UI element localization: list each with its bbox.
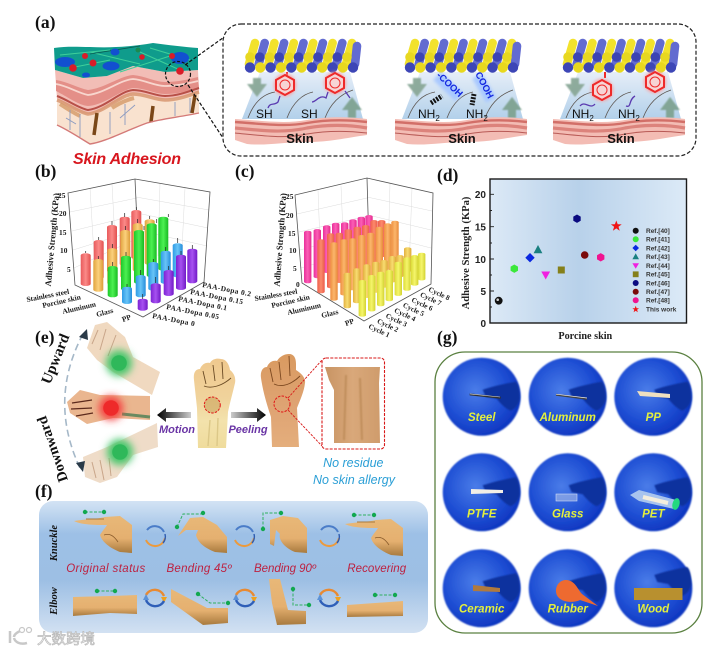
status labels: Bending 45º	[166, 563, 232, 575]
bars: aluminum row	[330, 221, 399, 301]
y ticks: 10	[475, 255, 486, 266]
data points	[495, 214, 622, 305]
PET sample: PET	[642, 508, 665, 520]
material axis labels: Glass	[95, 306, 114, 319]
y ticks	[475, 190, 486, 330]
y axis ticks and title: 20	[286, 211, 294, 220]
legend: Ref.[47]	[646, 289, 670, 296]
cycle icons elbow	[143, 590, 341, 606]
material axis labels: Porcine skin	[41, 292, 82, 310]
panel e: wrist motion test	[34, 322, 396, 487]
status labels: Recovering	[347, 563, 407, 575]
motion range arc	[65, 329, 88, 472]
mechanism 2: carboxyl and amine: 2	[483, 114, 488, 123]
upward wrist with green marker	[87, 322, 160, 395]
no allergy note: No skin allergy	[313, 473, 396, 487]
hand original	[74, 510, 132, 553]
material axis labels: Stainless steel	[26, 287, 70, 304]
legend: Ref.[42]	[646, 245, 670, 252]
cycle axis labels: Cycle 7	[419, 291, 443, 308]
mechanism 3: catechol and amine: Skin	[607, 131, 635, 146]
y axis ticks and title: 0	[296, 280, 300, 289]
y axis ticks and title: 15	[59, 228, 67, 237]
rubber sample	[529, 549, 607, 627]
status labels	[66, 563, 407, 575]
bars: aluminum	[108, 217, 168, 297]
formulation axis labels: PAA-Dopa 0	[152, 311, 196, 328]
mechanism 1: catechol and thiol	[235, 43, 367, 146]
legend: Ref.[40]	[646, 228, 670, 235]
background panel	[39, 501, 428, 633]
formulation axis labels: PAA-Dopa 0.2	[202, 280, 252, 298]
legend: Ref.[48]	[646, 298, 670, 305]
mechanism 2: carboxyl and amine: NH	[466, 107, 483, 121]
formulation axis labels: PAA-Dopa 0.1	[178, 294, 228, 312]
wood sample	[614, 549, 692, 627]
hydrogel top layer	[54, 43, 198, 78]
skin adhesion caption: Skin Adhesion	[73, 151, 181, 168]
green frame	[435, 352, 702, 633]
legend: This work	[646, 306, 677, 313]
y ticks: 0	[480, 319, 486, 330]
mechanism 2: carboxyl and amine: Skin	[448, 131, 476, 146]
y ticks: 5	[480, 287, 486, 298]
inset of clean skin	[322, 358, 384, 449]
PP sample	[614, 358, 692, 436]
bars: glass row	[344, 247, 411, 308]
cycle axis labels	[367, 286, 451, 340]
y axis title: Adhesive Strength (KPa)	[461, 196, 472, 309]
panel d label: (d)	[437, 165, 459, 185]
zoom lines to inset	[288, 360, 322, 446]
mechanism 3: catechol and amine: NH	[572, 107, 589, 121]
elbow recovered	[347, 593, 403, 617]
formulation axis labels: PAA-Dopa 0.15	[190, 287, 244, 306]
panel b: 3D bar chart	[26, 179, 252, 328]
bars: stainless steel row	[304, 215, 373, 283]
legend: Ref.[44]	[646, 263, 670, 270]
status labels: Original status	[66, 563, 145, 575]
glass sample: Glass	[552, 508, 583, 520]
cycle axis labels: Cycle 6	[410, 296, 434, 313]
downward wrist with green marker	[83, 423, 158, 483]
motion label: Motion	[159, 424, 195, 436]
pink layers	[55, 66, 199, 114]
material axis labels: Stainless steel	[254, 287, 298, 303]
mechanism 2: carboxyl and amine: COOH	[472, 70, 496, 101]
steel sample	[443, 358, 521, 436]
panel c label: (c)	[235, 161, 255, 181]
cycle axis labels: Cycle 4	[393, 307, 417, 324]
axes box	[295, 178, 433, 321]
plot frame	[490, 179, 686, 323]
panel g: adhesion to materials	[435, 352, 702, 633]
cycle axis labels: Cycle 8	[427, 286, 451, 303]
y ticks: 20	[475, 190, 486, 201]
elbow bent	[171, 589, 230, 625]
legend: Ref.[43]	[646, 254, 670, 261]
neutral wrist with red marker	[67, 390, 150, 424]
row title elbow: Elbow	[49, 586, 60, 616]
material axis labels: Aluminum	[286, 300, 322, 317]
ceramic sample: Ceramic	[459, 604, 505, 616]
material axis labels: Glass	[320, 307, 339, 320]
aluminum sample	[529, 358, 607, 436]
y axis ticks and title: 5	[293, 264, 297, 273]
central fist	[194, 359, 235, 448]
error bars	[86, 207, 192, 299]
steel sample: Steel	[468, 412, 496, 424]
material axis labels: Porcine skin	[270, 292, 311, 310]
y axis ticks and title	[43, 191, 71, 287]
y axis ticks and title: 10	[289, 246, 297, 255]
glass sample	[529, 453, 607, 531]
panel c: 3D bar chart cycles	[254, 178, 451, 340]
bars: PP row	[359, 253, 425, 317]
panel a: skin block illustration	[54, 43, 199, 144]
no residue note: No residue	[323, 456, 384, 470]
cycle icons knuckle	[146, 526, 339, 546]
wood sample: Wood	[637, 604, 670, 616]
elbow ninety	[269, 579, 311, 625]
legend: Ref.[45]	[646, 272, 670, 279]
y ticks: 15	[475, 222, 486, 234]
mechanism 1: catechol and thiol: Skin	[286, 131, 314, 146]
aluminum sample: Aluminum	[539, 412, 596, 424]
material axis labels	[254, 287, 356, 328]
mechanism 1: catechol and thiol: SH	[301, 107, 318, 121]
elbow straight	[73, 589, 137, 616]
y axis ticks and title: 15	[288, 229, 296, 238]
formulation axis labels: PAA-Dopa 0.05	[166, 302, 220, 321]
material axis labels: PP	[344, 316, 356, 328]
watermark: 大数跨境	[37, 630, 95, 648]
y axis ticks and title: Adhesive Strength (KPa)	[43, 193, 61, 287]
mechanism 1: catechol and thiol: SH	[256, 107, 273, 121]
y axis ticks and title: Adhesive Strength (KPa)	[272, 193, 288, 287]
lens circle	[166, 62, 190, 86]
cycle axis labels: Cycle 3	[384, 312, 409, 329]
right arrow	[231, 408, 266, 422]
status labels: Bending 90º	[254, 563, 317, 575]
bars: stainless steel	[81, 210, 141, 286]
panel e label: (e)	[35, 327, 55, 347]
y axis ticks and title: 25	[58, 191, 66, 200]
legend: Ref.[46]	[646, 280, 670, 287]
mechanism 2: carboxyl and amine: 2	[435, 114, 440, 123]
legend: Ref.[41]	[646, 237, 670, 244]
material axis labels: Aluminum	[61, 299, 97, 316]
left arrow	[157, 408, 191, 422]
y axis ticks and title: 20	[59, 209, 67, 218]
rubber sample: Rubber	[548, 604, 588, 616]
PTFE sample: PTFE	[467, 508, 497, 520]
bars: porcine skin	[93, 219, 155, 292]
y axis ticks and title: 10	[60, 246, 68, 255]
hand recovering	[345, 513, 403, 556]
panel g label: (g)	[437, 327, 458, 347]
mechanism 2: carboxyl and amine: NH	[418, 107, 435, 121]
panel f: knuckle and elbow bending	[39, 501, 428, 633]
y axis ticks and title: 5	[67, 265, 71, 274]
panel d: scatter chart	[461, 179, 686, 342]
bars: glass	[122, 243, 183, 304]
y axis ticks and title	[272, 192, 300, 289]
PTFE sample	[443, 453, 521, 531]
mechanism 3: catechol and amine: NH	[618, 107, 635, 121]
panel a label: (a)	[35, 12, 56, 32]
peeling label: Peeling	[228, 424, 268, 436]
mechanism 3: catechol and amine	[553, 43, 685, 146]
material axis labels: PP	[121, 312, 133, 324]
hand bending 90	[261, 511, 307, 553]
cycle axis labels: Cycle 5	[402, 301, 426, 318]
PET sample	[614, 453, 692, 531]
hand bending 45	[175, 511, 227, 553]
panel b label: (b)	[35, 161, 57, 181]
mechanism 2: carboxyl and amine	[395, 43, 527, 146]
cycle axis labels: Cycle 1	[367, 323, 391, 340]
panel f label: (f)	[35, 481, 53, 501]
formulation axis labels	[152, 280, 252, 328]
cycle axis labels: Cycle 2	[376, 317, 400, 334]
mechanism 3: catechol and amine: 2	[589, 114, 594, 123]
ceramic sample	[443, 549, 521, 627]
panel a: dashed mechanism box	[223, 24, 696, 156]
mechanism 3: catechol and amine: 2	[635, 114, 640, 123]
axes box	[68, 179, 210, 317]
mechanism 2: carboxyl and amine: -COOH	[434, 70, 465, 100]
bars: porcine skin row	[317, 220, 385, 293]
watermark	[10, 628, 95, 648]
PP sample: PP	[646, 412, 661, 424]
cream lower layer	[57, 89, 199, 144]
row title knuckle: Knuckle	[49, 525, 60, 562]
material axis labels	[26, 287, 133, 324]
right fist	[261, 354, 305, 447]
downward label: Downward	[34, 414, 72, 484]
y axis ticks and title: 25	[286, 192, 294, 201]
zoom connector lines	[185, 35, 227, 138]
upward label: Upward	[39, 331, 74, 386]
legend	[632, 228, 677, 313]
bars: PP	[138, 249, 197, 311]
x axis title: Porcine skin	[558, 331, 613, 342]
